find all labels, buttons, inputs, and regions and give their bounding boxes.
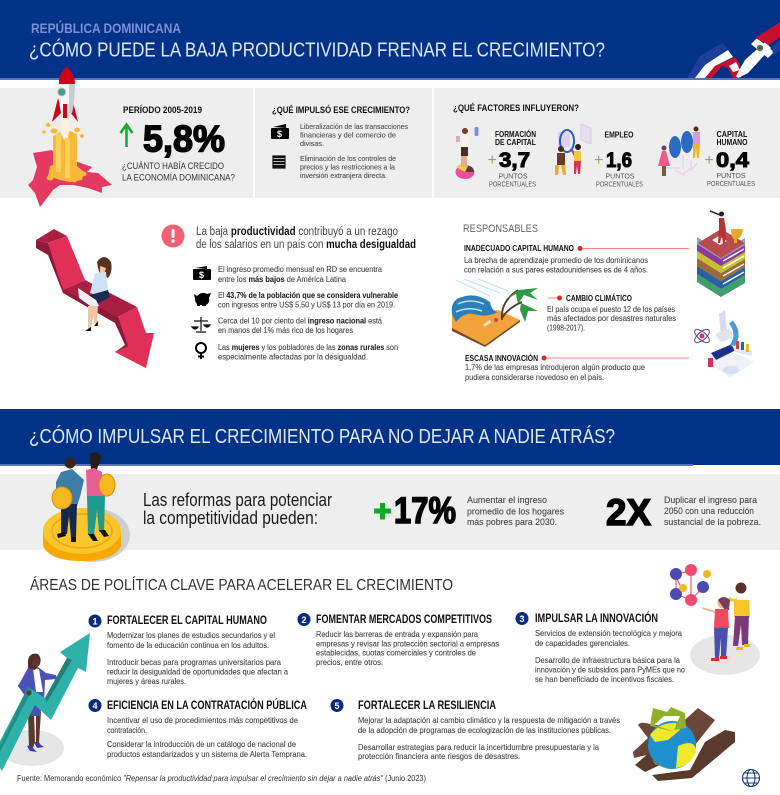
source: Fuente: Memorando económico "Repensar la productividad para impulsar el crecimiento sin dejar a nadie atrás" (Junio 2023) (17, 774, 426, 783)
item: human capital: La brecha de aprendizaje promedio de los dominicanos (464, 256, 648, 265)
stat: +17% (374, 490, 564, 531)
policy 4: EFICIENCIA EN LA CONTRATACIÓN PÚBLICA (107, 699, 307, 712)
icon: scale (192, 317, 210, 332)
factor: human capital: CAPITAL (716, 130, 748, 139)
factor: human capital: 0,4 (716, 149, 749, 172)
policy 3: de capacidades gerenciales. (535, 639, 630, 648)
bullet: women (218, 343, 398, 362)
statement (143, 490, 332, 528)
item: climate change: más afectados por desastres naturales (547, 314, 676, 323)
factor: employment: PORCENTUALES (596, 182, 643, 188)
policy 1: fomento de la educación continua en los adultos. (107, 641, 269, 650)
factor: human capital: + (704, 152, 714, 169)
icon: alert (162, 224, 184, 248)
factor: employment: 1,6 (606, 149, 632, 172)
policy 3: se han beneficiado de incentivos fiscales. (535, 675, 674, 684)
policy 5: Mejorar la adaptación al cambio climático y la respuesta de mitigación a través (358, 716, 620, 725)
policy 1: Modernizar los planes de estudios secundarios y el (107, 631, 275, 640)
stat: +17%: promedio de los hogares (467, 506, 564, 518)
factor: human capital: HUMANO (716, 138, 748, 147)
icon: microscope lab (693, 310, 754, 378)
woman (78, 257, 112, 331)
policy 3 (516, 612, 686, 684)
text: liberalization (300, 122, 408, 148)
policy 2: precios, entre otros. (316, 658, 383, 667)
item: climate change: El país ocupa el puesto 12 de los países (547, 305, 675, 314)
bullet: vulnerable: El 43,7% de la población que se considera vulnerable (218, 291, 398, 300)
icon: network and people (670, 564, 760, 675)
main title: ¿CÓMO PUEDE LA BAJA PRODUCTIVIDAD FRENAR EL CRECIMIENTO? (29, 38, 605, 62)
policy 1: 1 (92, 616, 98, 626)
factor: employment: + (594, 152, 603, 169)
bullet: income: El ingreso promedio mensual en RD se encuentra (218, 265, 383, 274)
policy 4: Considerar la introducción de un catálogo de nacional de (107, 740, 297, 749)
bullet: national income (218, 316, 383, 335)
icon: woman on pie chart (456, 127, 478, 179)
policy 5: Desarrollar estrategias para reducir la incertidumbre presupuestaria y la (358, 743, 600, 752)
bullet: national income: Cerca del 10 por ciento del ingreso nacional está (218, 316, 383, 326)
item: innovation: ESCASA INNOVACIÓN (465, 354, 538, 363)
factor: employment (594, 130, 643, 188)
icon: green up arrow (120, 124, 132, 147)
question: ¿CUÁNTO HABÍA CRECIDO (122, 161, 224, 172)
bullet: income: entre los más bajos de América Latina (218, 275, 347, 284)
stat: 2X: sustancial de la pobreza. (664, 517, 761, 528)
panel: factors (434, 88, 780, 198)
period label: PERÍODO 2005-2019 (123, 105, 202, 116)
text: elimination: Eliminación de los controles de (300, 154, 396, 163)
stat: +17%: más pobres para 2030. (467, 517, 557, 528)
icon: piggy bank (194, 293, 211, 306)
bullet: national income: en manos del 1% más rico de los hogares (218, 326, 353, 335)
stat: 2X: 2050 con una reducción (664, 506, 754, 517)
stat: 2X: Duplicar el ingreso para (664, 495, 758, 506)
stat: 2X: 2X (606, 492, 651, 533)
statement (196, 226, 416, 251)
text: liberalization: financieras y del comercio de (300, 130, 396, 140)
bullet: women: Las mujeres y los pobladores de las zonas rurales son (218, 343, 398, 352)
section title: ¿CÓMO IMPULSAR EL CRECIMIENTO PARA NO DEJAR A NADIE ATRÁS? (29, 425, 615, 448)
heading: ¿QUÉ FACTORES INFLUYERON? (453, 103, 579, 114)
top banner (0, 0, 780, 80)
policy 2: establecidas, cuotas comerciales y controles de (316, 648, 477, 658)
policy 4: contratación. (107, 726, 147, 735)
statement: Las reformas para potenciar (143, 490, 332, 510)
text: elimination (300, 154, 396, 180)
policy 1: mujeres y áreas rurales. (107, 677, 186, 686)
bullet: women: especialmente afectadas por la desigualdad. (218, 352, 368, 362)
factor: employment: PUNTOS (605, 174, 635, 180)
policy 2 (298, 613, 499, 667)
statement: la competitividad pueden: (143, 508, 318, 528)
text: elimination: inversión extranjera directa. (300, 171, 387, 180)
item: climate change: CAMBIO CLIMÁTICO (566, 294, 632, 303)
question: LA ECONOMÍA DOMINICANA? (122, 172, 235, 184)
policy 3: 3 (519, 614, 525, 624)
policy 5: FORTALECER LA RESILIENCIA (358, 700, 496, 712)
statement: La baja productividad contribuyó a un rezago (196, 226, 398, 238)
statement: de los salarios en un país con mucha desigualdad (196, 239, 416, 251)
icon: world bank logo (742, 770, 760, 786)
policy 1: reducir la desigualdad de oportunidades que afectan a (107, 668, 289, 676)
factor: employment: EMPLEO (604, 130, 634, 140)
item: climate change: (1998-2017). (547, 324, 585, 332)
item: innovation: 1,7% de las empresas introdujeron algún producto que (465, 363, 645, 372)
icon: money: $ (277, 129, 282, 139)
icon: abacus (272, 155, 286, 169)
factor: human capital (704, 130, 755, 188)
bullet: vulnerable: con ingresos entre US$ 5,50 y US$ 13 por día en 2019. (218, 300, 395, 310)
text: elimination: precios y las restricciones a la (300, 162, 396, 172)
factor: capital formation: PUNTOS (498, 174, 528, 180)
policy 4: Incentivar el uso de procedimientos más competitivos de (107, 716, 299, 725)
panel: growth (0, 67, 253, 207)
icon: money (271, 124, 289, 139)
policy 1: Introducir becas para programas universitarios para (107, 658, 282, 667)
policy 5: de la adopción de programas de ecologización de las instituciones públicas. (358, 726, 611, 735)
policy 4: 4 (92, 701, 98, 711)
heading: ¿QUÉ IMPULSÓ ESE CRECIMIENTO? (272, 104, 410, 116)
policy 2: Reducir las barreras de entrada y expansión para (316, 630, 479, 639)
icon: falling red arrow with woman (36, 229, 154, 368)
icon: female symbol (196, 343, 206, 359)
panel: reforms (0, 452, 780, 562)
icon: people with brains (658, 126, 700, 176)
icon: stack of books (697, 211, 745, 297)
stat: +17%: 17% (394, 490, 456, 531)
policy 5: 5 (334, 701, 340, 711)
heading: policy areas: ÁREAS DE POLÍTICA CLAVE PARA ACELERAR EL CRECIMIENTO (30, 575, 453, 594)
policy 3: Servicios de extensión tecnológica y mejora (535, 629, 683, 638)
stat: 2X (606, 492, 761, 533)
icon: earth in hands (633, 707, 735, 781)
stat: +17%: Aumentar el ingreso (467, 495, 547, 506)
item: climate change (547, 294, 676, 332)
item: innovation: pudiera considerarse novedoso en el país. (465, 373, 604, 382)
policy 3: Desarrollo de infraestructura básica para la (535, 656, 681, 665)
factor: human capital: PUNTOS (716, 173, 746, 180)
text: liberalization: divisas. (300, 139, 324, 148)
factor: capital formation: PORCENTUALES (489, 182, 536, 188)
text: liberalization: Liberalización de las transacciones (300, 122, 408, 131)
policy 4 (88, 699, 307, 759)
icon: money: $ (199, 270, 204, 280)
factor: capital formation: DE CAPITAL (495, 138, 536, 147)
policy 2: empresas y revisar las protección sectorial a empresas (316, 640, 499, 648)
question (122, 161, 235, 184)
policy 5 (330, 699, 620, 761)
item: human capital: con relación a sus pares estadounidenses es de 4 años. (464, 266, 648, 274)
item: innovation (465, 354, 689, 382)
heading: responsables: RESPONSABLES (463, 223, 538, 235)
policy 1 (88, 614, 289, 686)
icon: people with magnifier (555, 124, 591, 175)
item: human capital: INADECUADO CAPITAL HUMANO (464, 244, 574, 253)
icon: couple on coin (43, 452, 130, 562)
policy 5: protección financiera ante riesgos de desastres. (358, 752, 520, 761)
stat: 5,8%: 5,8% (143, 118, 225, 160)
icon: flag ribbon (687, 20, 780, 78)
factor: human capital: PORCENTUALES (707, 181, 755, 188)
icon: wave and palm island (452, 279, 538, 347)
icon: money (193, 266, 211, 280)
policy 2: FOMENTAR MERCADOS COMPETITIVOS (316, 614, 492, 626)
country label: REPÚBLICA DOMINICANA (31, 19, 181, 36)
policy 2: 2 (301, 615, 307, 625)
factor: capital formation: + (488, 152, 497, 169)
policy 3: IMPULSAR LA INNOVACIÓN (535, 612, 658, 625)
policy 4: productos estandarizados y un sistema de Alerta Temprana. (107, 750, 307, 759)
factor: capital formation: 3,7 (499, 149, 530, 172)
factor: capital formation (488, 130, 536, 188)
policy 1: FORTALECER EL CAPITAL HUMANO (107, 615, 267, 627)
second banner (0, 409, 780, 466)
icon: map with coins and rocket (28, 67, 112, 207)
icon: woman with teal growth arrow (0, 633, 90, 771)
item: human capital (464, 244, 689, 274)
bullet: income (218, 265, 383, 284)
policy 3: innovación y de subsidios para PyMEs que no (535, 666, 686, 674)
factor: capital formation: FORMACIÓN (495, 130, 536, 139)
panel: drivers (255, 88, 432, 198)
bullet: vulnerable (218, 291, 398, 310)
